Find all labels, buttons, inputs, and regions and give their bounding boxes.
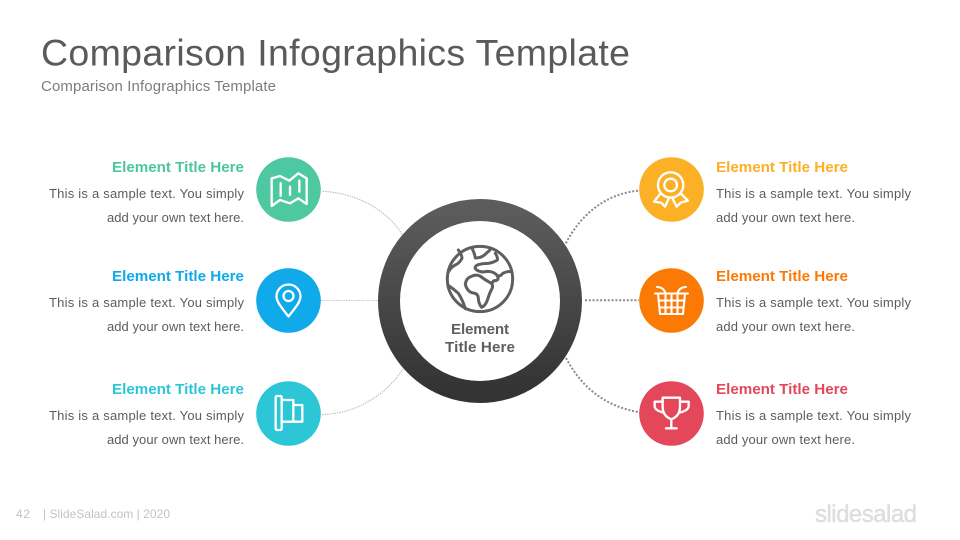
item: top left (49, 157, 321, 225)
item: top right: add your own text here. (716, 210, 855, 225)
item: middle right: This is a sample text. You simply (716, 295, 912, 310)
connector: middle left (321, 300, 378, 302)
title: Comparison Infographics Template (41, 32, 630, 74)
icon: globe (447, 246, 513, 312)
center label: Title Here (445, 339, 515, 356)
item: top left: Element Title Here (112, 159, 244, 176)
subtitle: Comparison Infographics Template (41, 78, 276, 95)
central ring (389, 210, 571, 392)
logo: slidesalad (815, 501, 917, 528)
item: top right: Element Title Here (716, 159, 848, 176)
connector: middle right (585, 299, 639, 301)
item: bottom left: add your own text here. (107, 432, 244, 447)
item: top left: add your own text here. (107, 210, 244, 225)
item: middle left: add your own text here. (107, 319, 244, 334)
item: bottom right: add your own text here. (716, 432, 855, 447)
footer: copyright: | SlideSalad.com | 2020 (43, 507, 170, 521)
item: bottom right: This is a sample text. You simply (716, 408, 912, 423)
item: bottom right (639, 381, 912, 447)
item: bottom left: Element Title Here (112, 381, 244, 398)
connector: top left (322, 191, 402, 234)
item: top right: This is a sample text. You simply (716, 186, 912, 201)
item: middle left: This is a sample text. You simply (49, 295, 244, 310)
item: bottom right: Element Title Here (716, 381, 848, 398)
footer: page number: 42 (16, 507, 30, 521)
item: middle right: Element Title Here (716, 268, 848, 285)
item: middle right: add your own text here. (716, 319, 855, 334)
item: middle left (49, 268, 321, 334)
item: top right (639, 157, 912, 225)
center label: Element (451, 321, 509, 338)
item: middle left: Element Title Here (112, 268, 244, 285)
connector: bottom right (566, 358, 638, 412)
item: top left: This is a sample text. You simply (49, 186, 244, 201)
connector: bottom left (322, 369, 403, 414)
item: bottom left: This is a sample text. You simply (49, 408, 244, 423)
item: middle right (639, 268, 912, 334)
center label (445, 321, 515, 356)
connector: top right (565, 191, 638, 245)
item: bottom left (49, 381, 321, 447)
